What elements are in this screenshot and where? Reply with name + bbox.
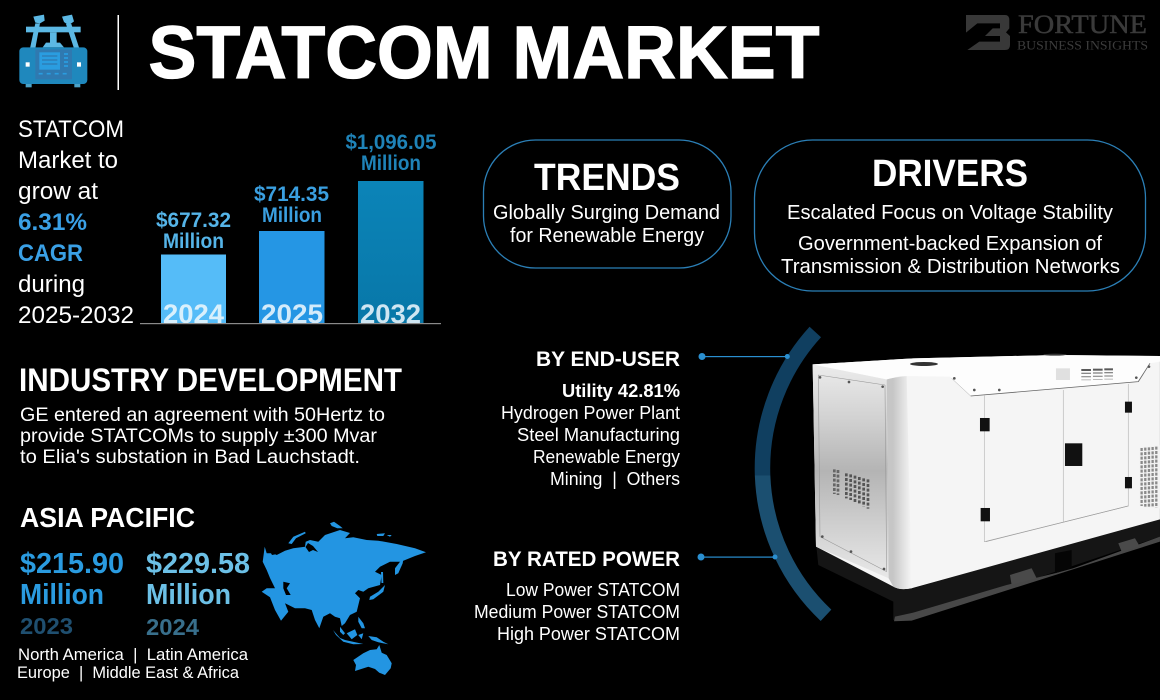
bar 2025: 2025: [261, 299, 323, 329]
top box: [1056, 368, 1070, 380]
map: Asia Pacific: [262, 522, 426, 675]
stat: 2024 value: Million: [146, 579, 231, 611]
panel: drivers: Escalated Focus on Voltage Stability: [787, 202, 1113, 224]
segment: by end-user: Hydrogen Power Plant: [501, 403, 680, 423]
connector: rated power: [698, 554, 778, 560]
connector: end-user: [698, 353, 790, 360]
segment: by rated power: Medium Power STATCOM: [474, 602, 680, 622]
bar 2024: [156, 209, 231, 329]
bar chart: [140, 131, 441, 329]
cabinet base: [816, 517, 1160, 621]
segment: by rated power: High Power STATCOM: [497, 624, 680, 644]
side vents: [834, 469, 868, 509]
regions list: Europe | Middle East & Africa: [17, 663, 240, 682]
stat: 2024 value: $229.58: [146, 548, 250, 580]
panel: trends: TRENDS: [534, 157, 680, 199]
top vents: [1081, 368, 1113, 380]
bar 2024: Million: [163, 230, 224, 253]
bar 2032: [346, 131, 437, 329]
bar 2032: Million: [361, 152, 421, 175]
growth statement text: during: [18, 271, 85, 298]
hinges and lock: [980, 402, 1132, 521]
panel: drivers: [754, 140, 1146, 291]
heading: industry development: INDUSTRY DEVELOPMENT: [19, 362, 402, 398]
segment: by rated power: [474, 548, 680, 644]
segment: by rated power: BY RATED POWER: [493, 548, 680, 571]
text block: industry development: [20, 405, 385, 468]
growth statement text: [18, 116, 134, 329]
bar 2025: [254, 183, 329, 329]
stat: 2023 value: 2023: [20, 613, 73, 639]
segment: by rated power: Low Power STATCOM: [506, 580, 680, 600]
top plate: [813, 355, 1160, 396]
cabinet body: [813, 355, 1160, 589]
growth statement text: 2025-2032: [18, 302, 134, 329]
machine image: STATCOM cabinet: [813, 354, 1160, 621]
growth statement text: STATCOM: [18, 116, 124, 143]
bar 2032: 2032: [360, 299, 421, 329]
segment: by end-user: Utility 42.81%: [562, 381, 680, 401]
panel: trends: for Renewable Energy: [510, 225, 704, 247]
segment: by end-user: Renewable Energy: [533, 447, 680, 467]
door outline: [984, 384, 1128, 542]
segment: by end-user: [501, 348, 680, 489]
heading: asia pacific: ASIA PACIFIC: [20, 502, 195, 533]
panel: drivers: Transmission & Distribution Networks: [781, 256, 1120, 278]
bar 2025: Million: [262, 204, 322, 227]
left side panel: [813, 364, 889, 578]
logo: Fortune Business Insights: [966, 10, 1148, 52]
growth statement text: grow at: [18, 178, 98, 205]
regions list: [17, 645, 249, 682]
segment: by end-user: Mining | Others: [550, 469, 680, 489]
bar 2024: $677.32: [156, 209, 231, 232]
bar 2024: 2024: [163, 299, 224, 329]
stat: 2024 value: [146, 548, 250, 640]
growth statement text: Market to: [18, 147, 118, 174]
panel: drivers: Government-backed Expansion of: [798, 233, 1102, 255]
stat: 2024 value: 2024: [146, 614, 199, 640]
stat: 2023 value: $215.90: [20, 548, 124, 580]
chart axis: [140, 323, 441, 324]
stat: 2023 value: [20, 548, 124, 639]
arc: [762, 332, 826, 615]
segment: by end-user: BY END-USER: [536, 348, 680, 371]
growth statement text: CAGR: [18, 240, 83, 267]
panel: drivers: DRIVERS: [872, 153, 1028, 195]
text block: industry development: provide STATCOMs to supply ±300 Mvar: [20, 426, 378, 447]
screws: [819, 365, 1150, 570]
bar 2025: $714.35: [254, 183, 329, 206]
panel: trends: Globally Surging Demand: [493, 202, 720, 224]
text block: industry development: to Elia's substation in Bad Lauchstadt.: [20, 447, 360, 468]
title divider line: [118, 15, 119, 90]
fan caps: [910, 354, 1067, 366]
logo: Fortune Business Insights: BUSINESS INSIGHTS: [1017, 38, 1148, 52]
text block: industry development: GE entered an agreement with 50Hertz to: [20, 405, 385, 426]
title: STATCOM MARKET: [148, 11, 820, 94]
panel: trends: [484, 140, 731, 268]
logo: Fortune Business Insights: FORTUNE: [1018, 10, 1147, 39]
rounded corner shading: [887, 376, 912, 589]
stat: 2023 value: Million: [20, 579, 104, 611]
regions list: North America | Latin America: [18, 645, 249, 664]
bar 2032: $1,096.05: [346, 131, 437, 154]
icon: STATCOM device: [19, 15, 87, 87]
growth statement text: 6.31%: [18, 209, 87, 236]
segment: by end-user: Steel Manufacturing: [517, 425, 680, 445]
right vent: [1140, 445, 1160, 509]
